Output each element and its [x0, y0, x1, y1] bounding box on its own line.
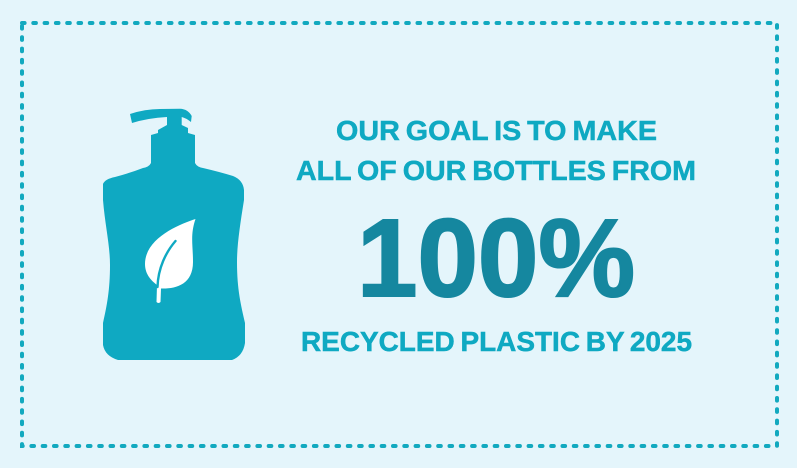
icon: soap bottle with leaf [103, 109, 245, 360]
big number: 100%: 100% [357, 197, 635, 320]
text: goal heading line 2: ALL OF OUR BOTTLES FROM [296, 155, 696, 186]
icon: leaf [145, 219, 196, 303]
bottle silhouette [103, 109, 245, 360]
text: recycled plastic line: RECYCLED PLASTIC BY 2025 [301, 326, 692, 357]
text: goal heading line 1: OUR GOAL IS TO MAKE [336, 115, 657, 146]
